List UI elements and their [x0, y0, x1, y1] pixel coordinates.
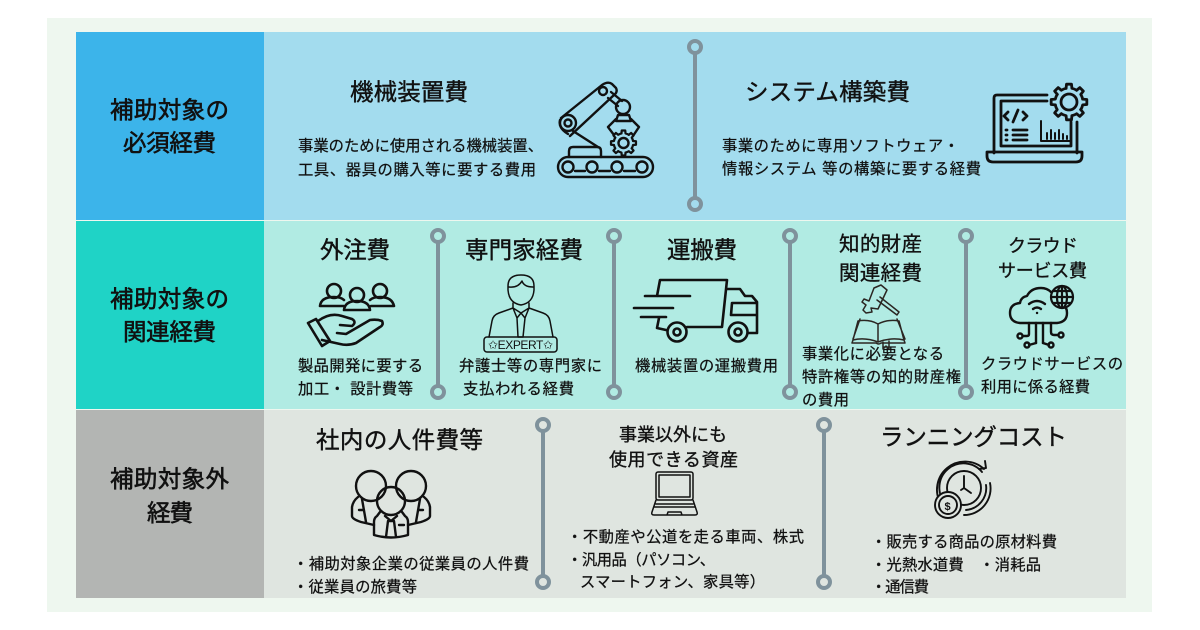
icon: laptop with gear [987, 84, 1087, 162]
text: intellectual property description: の費用 [802, 392, 849, 409]
text: experts description [459, 357, 602, 398]
title: experts: 専門家経費 [465, 237, 583, 263]
text: intellectual property description [802, 346, 961, 409]
text: experts description: 弁護士等の専門家に [459, 357, 602, 375]
text: running costs list [871, 534, 1057, 596]
text: running costs list: ・通信費 [871, 579, 929, 596]
heading: related expenses [110, 286, 229, 345]
text: outsourcing description: 加工・ 設計費等 [298, 380, 413, 398]
text: cloud description: クラウドサービスの [981, 356, 1123, 373]
icon: hand with people [308, 284, 394, 346]
connector: related 2 [608, 230, 620, 398]
connector: excluded 1 [537, 419, 549, 588]
heading: required expenses [110, 97, 229, 156]
heading: required expenses: 必須経費 [123, 130, 216, 156]
icon: gavel and book [852, 285, 905, 349]
label: expert badge text: ✩EXPERT✩ [488, 338, 553, 352]
text: general assets list: ・汎用品（パソコン、 [567, 552, 715, 569]
heading: related expenses: 補助対象の [110, 286, 229, 312]
text: general assets list: ・不動産や公道を走る車両、株式 [567, 529, 804, 546]
icon: expert person [484, 275, 557, 352]
text: intellectual property description: 事業化に必要となる [802, 346, 944, 363]
title: system: システム構築費 [745, 79, 910, 105]
text: intellectual property description: 特許権等の知的財産権 [802, 368, 961, 386]
title: cloud [998, 236, 1087, 281]
heading: excluded expenses: 経費 [147, 500, 193, 526]
heading: excluded expenses: 補助対象外 [110, 466, 230, 492]
text: general assets list: スマートフォン、家具等） [580, 573, 765, 591]
text: personnel list [293, 556, 529, 596]
icon: cloud network [1010, 288, 1067, 348]
text: transport description: 機械装置の運搬費用 [635, 358, 778, 375]
text: running costs list: ・光熱水道費 ・消耗品 [871, 557, 1041, 574]
connector: related 4 [960, 230, 972, 398]
text: outsourcing description: 製品開発に要する [298, 358, 423, 375]
title: running costs: ランニングコスト [880, 424, 1067, 450]
icon: clock and coin cycle [935, 461, 991, 518]
text: experts description: 支払われる経費 [463, 381, 574, 398]
panel: required expenses row [76, 32, 1126, 220]
title: personnel: 社内の人件費等 [316, 427, 483, 453]
text: cloud description: 利用に係る経費 [981, 379, 1090, 396]
text: machinery description [298, 138, 543, 179]
connector: required [689, 41, 701, 210]
label: dollar sign: $ [944, 501, 951, 513]
title: outsourcing: 外注費 [320, 237, 390, 263]
icon: laptop [652, 472, 697, 515]
title: general assets [609, 425, 738, 470]
title: intellectual property: 知的財産 [839, 233, 922, 256]
icon: robot arm [558, 83, 653, 177]
text: personnel list: ・補助対象企業の従業員の人件費 [293, 556, 529, 573]
title: general assets: 事業以外にも [619, 425, 727, 445]
title: machinery: 機械装置費 [350, 79, 468, 105]
title: transport: 運搬費 [667, 237, 737, 263]
text: system description: 事業のために専用ソフトウェア・ [722, 138, 959, 155]
title: intellectual property: 関連経費 [839, 262, 922, 285]
text: machinery description: 事業のために使用される機械装置、 [298, 138, 543, 155]
icon: group of employees [352, 471, 430, 538]
text: outsourcing description [298, 358, 423, 398]
text: personnel list: ・従業員の旅費等 [293, 578, 417, 596]
text: system description: 情報システム 等の構築に要する経費 [722, 160, 981, 178]
connector: excluded 2 [818, 419, 830, 588]
title: cloud: クラウド [1008, 236, 1078, 256]
title: cloud: サービス費 [998, 261, 1087, 281]
heading: excluded expenses [110, 466, 230, 526]
icon: globe [1051, 286, 1073, 308]
title: general assets: 使用できる資産 [609, 450, 738, 470]
title: intellectual property [839, 233, 922, 285]
panel: related expenses row [76, 221, 1126, 409]
heading: required expenses: 補助対象の [110, 97, 229, 123]
panel: excluded expenses row [76, 410, 1126, 598]
icon: truck [634, 280, 757, 342]
text: machinery description: 工具、器具の購入等に要する費用 [298, 161, 536, 179]
text: cloud description [981, 356, 1123, 396]
connector: related 1 [432, 230, 444, 398]
text: general assets list [567, 529, 804, 591]
text: running costs list: ・販売する商品の原材料費 [871, 534, 1057, 551]
connector: related 3 [784, 230, 796, 398]
heading: related expenses: 関連経費 [123, 319, 216, 345]
text: system description [722, 138, 981, 178]
